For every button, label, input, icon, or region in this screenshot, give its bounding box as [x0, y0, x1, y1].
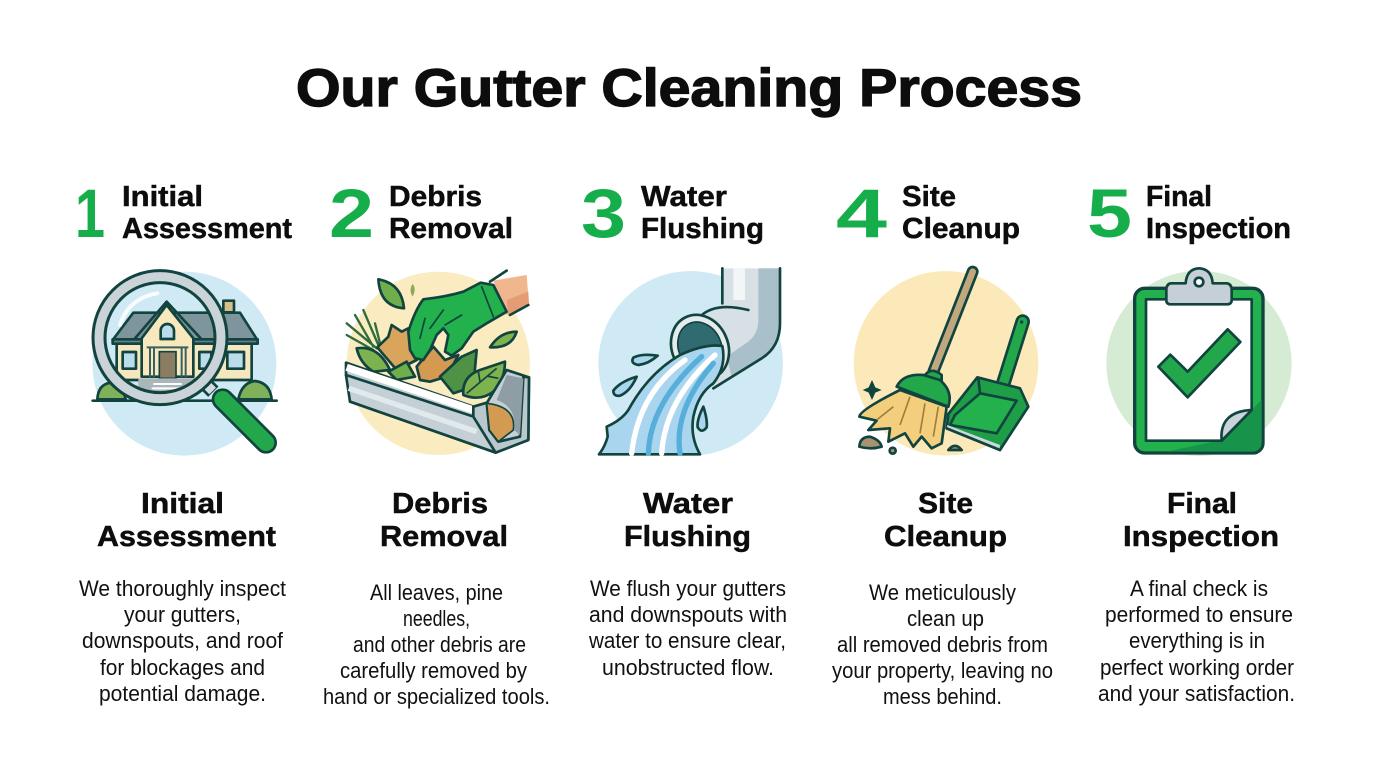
step 5 description: [1098, 576, 1295, 706]
step number 2: 2: [329, 175, 374, 252]
step 2 description: carefully removed by: [340, 658, 527, 683]
step 1 description: for blockages and: [100, 655, 265, 680]
step 1 description: [79, 576, 286, 706]
step 4 description: We meticulously: [869, 580, 1016, 605]
step 1 description: potential damage.: [99, 681, 266, 706]
step 2 description: [323, 580, 550, 709]
step 1 description: downspouts, and roof: [82, 628, 284, 653]
step 3 description: [588, 576, 787, 680]
step 2 header label: [389, 181, 513, 245]
title: Our Gutter Cleaning Process: [296, 59, 1082, 118]
icon: magnifying glass over house: [92, 271, 277, 456]
step 5 description: A final check is: [1130, 576, 1268, 601]
step 5 description: everything is in: [1129, 628, 1265, 653]
step 3 description: We flush your gutters: [590, 576, 786, 601]
step 2 description: hand or specialized tools.: [323, 684, 550, 709]
step 1 heading: Initial: [141, 488, 224, 520]
icon: gloved hand removing leaves from gutter: [346, 271, 530, 455]
step 4 header label: [902, 181, 1020, 245]
step 4 description: clean up: [907, 606, 984, 631]
step 1 heading: Assessment: [97, 521, 276, 553]
step 5 description: and your satisfaction.: [1098, 681, 1295, 706]
panel: step 5 final inspection: [1087, 175, 1295, 706]
icon: broom and dustpan: [854, 271, 1038, 456]
step 5 heading: [1123, 488, 1279, 553]
step 2 description: needles,: [403, 606, 470, 631]
step 5 header label: Final: [1146, 181, 1212, 213]
step number 4: 4: [836, 175, 887, 252]
step 4 heading: [884, 488, 1007, 553]
step 3 description: and downspouts with: [589, 602, 787, 627]
step 3 heading: [624, 488, 751, 553]
step 2 header label: Removal: [389, 213, 513, 245]
step 3 heading: Flushing: [624, 521, 751, 553]
step 1 heading: [97, 488, 276, 553]
step number 5: 5: [1087, 175, 1132, 252]
step 3 header label: Water: [641, 181, 727, 213]
step 1 header label: Initial: [122, 181, 203, 213]
step 3 heading: Water: [643, 488, 733, 520]
step 1 header label: Assessment: [122, 213, 292, 245]
step number 1: 1: [75, 175, 105, 252]
step 3 description: unobstructed flow.: [602, 655, 774, 680]
step 2 heading: Removal: [380, 521, 508, 553]
step 2 description: and other debris are: [353, 632, 526, 657]
step 5 header label: Inspection: [1146, 213, 1291, 245]
icon: downspout flushing water: [598, 268, 783, 456]
icon: clipboard with check mark: [1106, 268, 1292, 456]
step 4 heading: Site: [918, 488, 973, 520]
step 1 description: your gutters,: [124, 602, 241, 627]
step 1 header label: [122, 181, 292, 245]
step 2 heading: Debris: [392, 488, 488, 520]
step 4 description: all removed debris from: [837, 632, 1048, 657]
step 3 header label: Flushing: [641, 213, 764, 245]
step 4 description: mess behind.: [883, 684, 1002, 709]
step 5 description: performed to ensure: [1105, 602, 1293, 627]
step number 3: 3: [581, 175, 626, 252]
step 4 description: [832, 580, 1053, 709]
step 2 header label: Debris: [389, 181, 482, 213]
step 5 heading: Inspection: [1123, 521, 1279, 553]
panel: step 3 water flushing: [581, 175, 787, 680]
panel: step 2 debris removal: [323, 175, 550, 709]
step 4 header label: Cleanup: [902, 213, 1020, 245]
step 5 description: perfect working order: [1100, 655, 1294, 680]
step 2 heading: [380, 488, 508, 553]
panel: step 4 site cleanup: [832, 175, 1053, 709]
step 3 header label: [641, 181, 764, 245]
step 5 heading: Final: [1167, 488, 1237, 520]
panel: step 1 initial assessment: [75, 175, 292, 706]
step 4 description: your property, leaving no: [832, 658, 1053, 683]
step 1 description: We thoroughly inspect: [79, 576, 286, 601]
step 5 header label: [1146, 181, 1291, 245]
step 2 description: All leaves, pine: [370, 580, 503, 605]
step 3 description: water to ensure clear,: [588, 628, 786, 653]
step 4 heading: Cleanup: [884, 521, 1007, 553]
step 4 header label: Site: [902, 181, 956, 213]
